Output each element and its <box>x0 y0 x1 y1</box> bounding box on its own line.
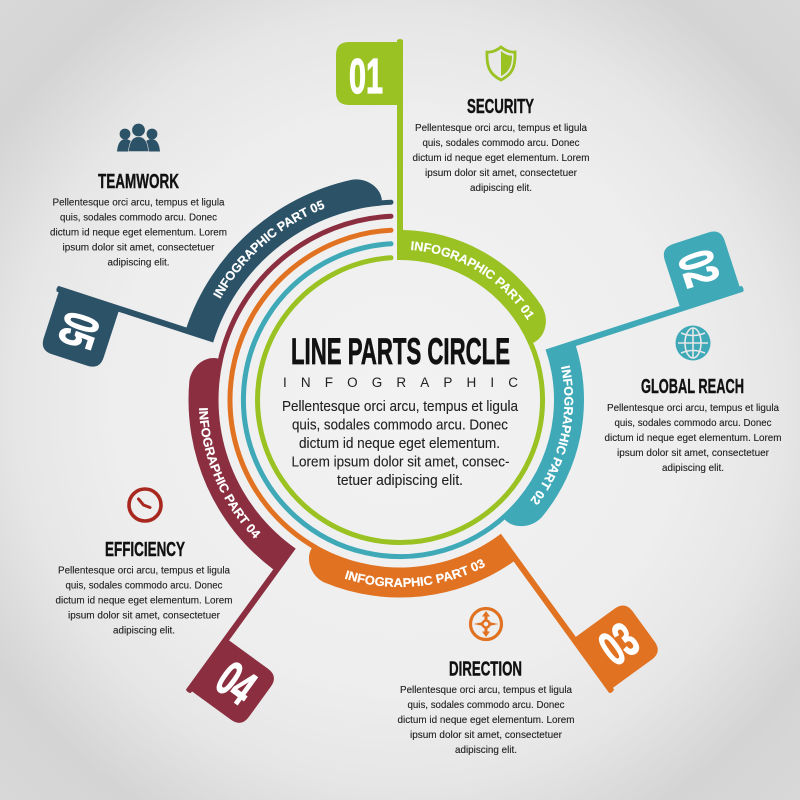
heading: efficiency: EFFICIENCY <box>105 538 185 561</box>
text: efficiency: ipsum dolor sit amet, consectetuer <box>68 610 221 622</box>
text: global reach: ipsum dolor sit amet, consectetuer <box>617 448 770 459</box>
text: direction: adipiscing elit. <box>455 745 517 756</box>
part 05 flag and band <box>42 179 382 367</box>
heading: security: SECURITY <box>467 95 534 118</box>
text: efficiency: Pellentesque orci arcu, tempus et ligula <box>58 566 230 576</box>
center paragraph: quis, sodales commodo arcu. Donec <box>292 418 508 434</box>
section: security <box>412 47 590 194</box>
text: efficiency <box>56 566 232 636</box>
icon: clock <box>129 489 161 521</box>
text: teamwork: quis, sodales commodo arcu. Donec <box>60 212 217 224</box>
icon: shield <box>487 47 515 80</box>
text: efficiency: quis, sodales commodo arcu. Donec <box>66 580 222 592</box>
text: teamwork: ipsum dolor sit amet, consectetuer <box>62 242 215 254</box>
center paragraph: Lorem ipsum dolor sit amet, consec- <box>292 454 510 470</box>
text: security: ipsum dolor sit amet, consectetuer <box>425 168 578 179</box>
band label 03: INFOGRAPHIC PART 03 <box>344 559 485 588</box>
text: security: Pellentesque orci arcu, tempus et ligula <box>415 123 587 134</box>
band label 01: INFOGRAPHIC PART 01 <box>411 241 534 320</box>
ring line: orange <box>230 230 391 547</box>
flag number 01: 01 <box>349 50 383 104</box>
text: teamwork <box>50 198 227 268</box>
text: security: adipiscing elit. <box>470 183 532 194</box>
flag number 03: 03 <box>590 613 649 676</box>
icon: globe <box>676 326 710 360</box>
center paragraph: dictum id neque eget elementum. <box>299 436 500 452</box>
ring line: green <box>258 258 543 543</box>
text: teamwork: dictum id neque eget elementum. Lorem <box>50 228 227 238</box>
text: direction <box>398 685 574 756</box>
heading: teamwork: TEAMWORK <box>98 170 179 193</box>
section: direction <box>398 608 574 756</box>
text: security: dictum id neque eget elementum. Lorem <box>412 153 590 164</box>
center paragraph <box>282 399 519 489</box>
section: global reach <box>604 326 782 474</box>
text: efficiency: adipiscing elit. <box>113 626 175 636</box>
concentric ring lines <box>220 202 543 557</box>
center title block <box>282 331 519 489</box>
text: direction: dictum id neque eget elementum. Lorem <box>398 715 574 726</box>
ring line: navy <box>375 202 391 204</box>
part 02 flag and band <box>502 232 744 526</box>
section: teamwork <box>50 124 227 268</box>
subtitle: INFOGRAPHIC <box>283 375 518 390</box>
center paragraph: Pellentesque orci arcu, tempus et ligula <box>282 399 519 415</box>
heading: direction: DIRECTION <box>449 658 522 680</box>
part 03 flag and band <box>308 534 658 693</box>
flag number 05: 05 <box>47 306 109 355</box>
band shape 03 <box>300 416 664 793</box>
main title: LINE PARTS CIRCLE <box>291 331 510 372</box>
icon: people <box>117 124 160 152</box>
band label 04: INFOGRAPHIC PART 04 <box>198 408 260 538</box>
section: efficiency <box>56 489 232 636</box>
part 01 flag and band <box>336 39 546 344</box>
flag number 04: 04 <box>206 652 265 715</box>
icon: compass <box>470 608 502 640</box>
text: security <box>412 123 590 194</box>
text: direction: quis, sodales commodo arcu. Donec <box>408 700 564 711</box>
text: global reach: quis, sodales commodo arcu. Donec <box>614 418 772 429</box>
text: efficiency: dictum id neque eget elementum. Lorem <box>56 596 232 606</box>
band shape 01 <box>336 39 546 344</box>
band label 05: INFOGRAPHIC PART 05 <box>213 200 324 299</box>
text: direction: Pellentesque orci arcu, tempus et ligula <box>400 685 572 696</box>
flag number 02: 02 <box>667 244 729 293</box>
text: security: quis, sodales commodo arcu. Donec <box>422 138 580 149</box>
text: global reach <box>604 403 782 474</box>
text: global reach: Pellentesque orci arcu, tempus et ligula <box>607 403 779 414</box>
text: global reach: adipiscing elit. <box>662 463 724 474</box>
ring line: maroon <box>220 216 391 362</box>
text: global reach: dictum id neque eget elementum. Lorem <box>604 433 782 444</box>
center paragraph: tetuer adipiscing elit. <box>337 473 463 489</box>
band shape 04 <box>38 350 409 730</box>
ring line: teal <box>243 244 505 557</box>
text: teamwork: adipiscing elit. <box>108 258 170 268</box>
part 04 flag and band <box>186 358 296 723</box>
band label 02: INFOGRAPHIC PART 02 <box>530 366 574 505</box>
band shape 05 <box>37 101 387 437</box>
band shape 02 <box>439 228 792 532</box>
text: direction: ipsum dolor sit amet, consectetuer <box>410 730 563 741</box>
text: teamwork: Pellentesque orci arcu, tempus et ligula <box>52 198 225 208</box>
